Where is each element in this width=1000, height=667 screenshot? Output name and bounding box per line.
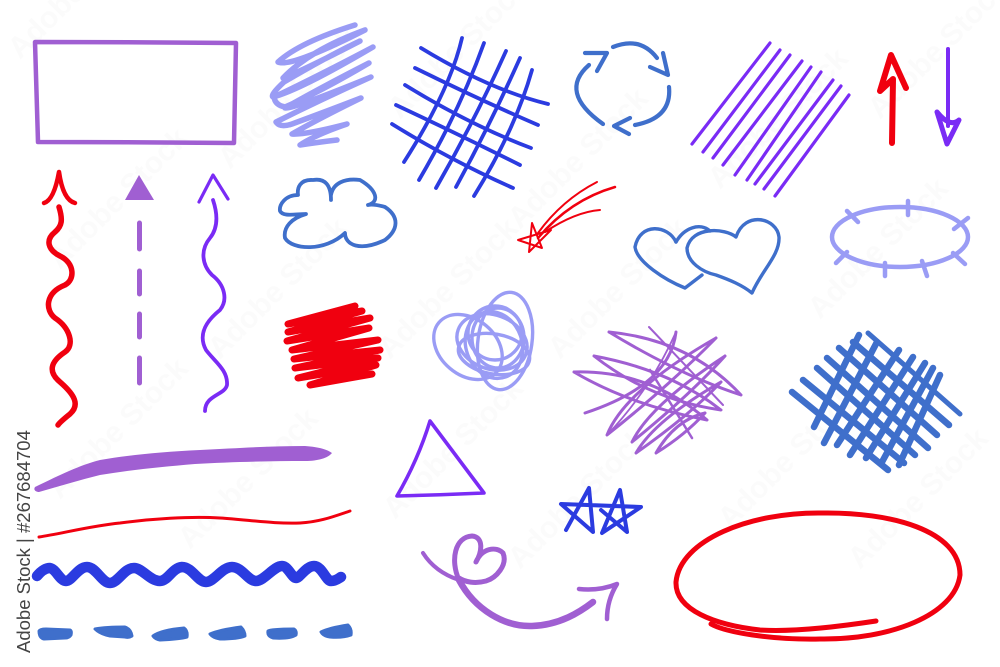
text: Adobe Stock	[42, 352, 195, 505]
steel blue thick grid	[792, 333, 960, 470]
text: Adobe Stock	[702, 42, 855, 195]
purple dashed arrow	[125, 175, 154, 383]
cloud	[280, 180, 396, 247]
text: Adobe Stock	[542, 212, 695, 365]
red thin stroke	[39, 511, 350, 537]
stock credit: Adobe Stock | #267684704	[13, 430, 34, 653]
rectangle frame	[35, 42, 236, 143]
violet wavy arrow	[199, 175, 228, 411]
icon: violet down arrow	[937, 49, 959, 144]
purple loop crosshatch	[574, 327, 741, 453]
stitched oval	[832, 201, 968, 276]
text: Adobe Stock	[212, 22, 365, 175]
text: Adobe Stock	[372, 212, 525, 365]
text: Adobe Stock	[42, 122, 195, 275]
blue stars	[561, 488, 641, 533]
red ellipse	[676, 513, 960, 639]
purple brush stroke	[34, 446, 332, 492]
violet triangle	[397, 421, 484, 496]
text: Adobe Stock	[502, 422, 655, 575]
red scribble	[287, 306, 380, 385]
text: Adobe Stock	[802, 172, 955, 325]
text: Adobe Stock	[202, 212, 355, 365]
periwinkle tangle	[421, 289, 539, 393]
periwinkle scribble	[272, 25, 373, 145]
text: Adobe Stock	[172, 402, 325, 555]
text: Adobe Stock	[377, 372, 530, 525]
blue crosshatch grid	[392, 38, 548, 196]
hearts	[635, 220, 779, 293]
shooting star	[518, 182, 615, 252]
text: Adobe Stock	[502, 82, 655, 235]
red wavy arrow	[44, 172, 75, 425]
violet diagonal lines	[692, 43, 849, 196]
blue wave stroke	[37, 566, 341, 583]
text: Adobe Stock	[842, 422, 995, 575]
recycle arrows	[576, 43, 669, 134]
icon: red up arrow	[880, 55, 906, 143]
steel blue dashes	[39, 625, 351, 640]
purple heart swirl arrow	[423, 536, 617, 626]
text: Adobe Stock	[712, 382, 865, 535]
